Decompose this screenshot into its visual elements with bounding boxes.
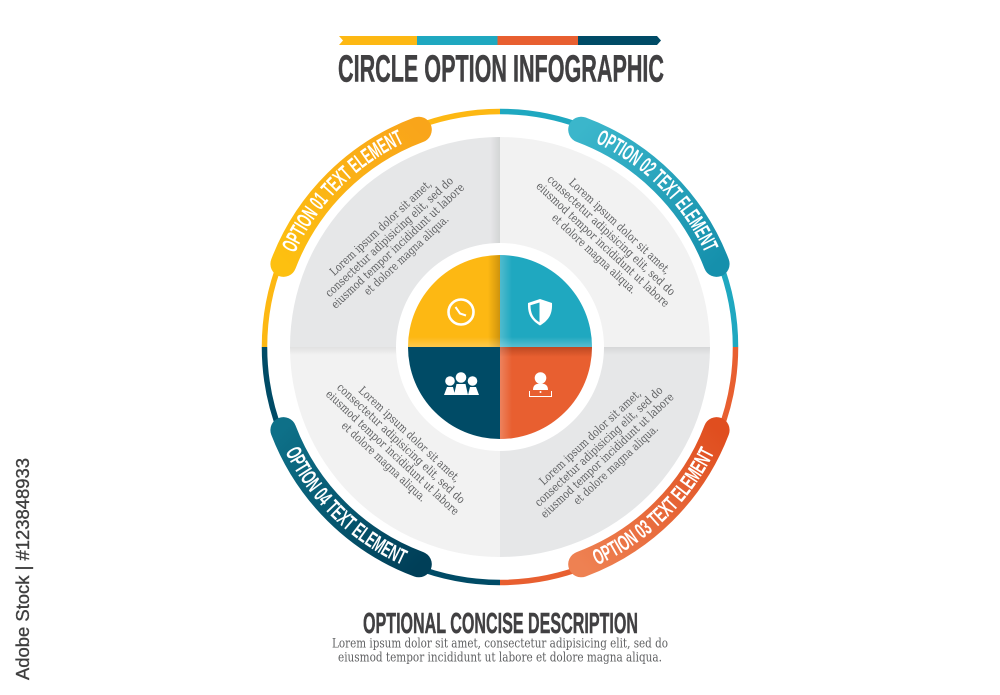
option 2 band xyxy=(568,116,730,277)
header colour bar xyxy=(339,36,661,45)
panel: quadrant disk xyxy=(290,137,710,557)
white inner ring xyxy=(396,243,604,451)
text block: option 1: consectetur adipisicing elit, sed do xyxy=(322,174,456,300)
description body xyxy=(332,636,668,666)
description body: eiusmod tempor incididunt ut labore et dolore magna aliqua. xyxy=(338,650,662,666)
option 4 band: OPTION 04 TEXT ELEMENT xyxy=(286,447,408,564)
option 1 band xyxy=(270,116,432,277)
icon: laptop user xyxy=(529,372,552,397)
text block: option 2: eiusmod tempor incididunt ut labore xyxy=(533,179,673,310)
text block: option 4: consectetur adipisicing elit, sed do xyxy=(334,380,468,506)
text block: option 4: et dolore magna aliqua. xyxy=(339,419,429,505)
text block: option 3: consectetur adipisicing elit, sed do xyxy=(532,383,666,509)
text block: option 4: Lorem ipsum dolor sit amet, xyxy=(356,383,463,485)
option 4 band xyxy=(270,417,432,578)
text block: option 2: consectetur adipisicing elit, sed do xyxy=(544,172,678,298)
option 2 band: OPTION 02 TEXT ELEMENT xyxy=(598,130,719,251)
option 3 band: OPTION 03 TEXT ELEMENT xyxy=(593,446,714,564)
text block: option 1: et dolore magna aliqua. xyxy=(361,212,451,298)
text block: option 2: Lorem ipsum dolor sit amet, xyxy=(566,175,674,277)
description heading: OPTIONAL CONCISE DESCRIPTION xyxy=(363,608,638,640)
text block: option 1: Lorem ipsum dolor sit amet, xyxy=(327,177,434,278)
infographic canvas xyxy=(15,36,738,680)
text block: option 1: eiusmod tempor incididunt ut labore xyxy=(328,180,467,311)
text block: option 2: et dolore magna aliqua. xyxy=(549,211,640,297)
icon: team xyxy=(444,372,479,395)
option 3 band xyxy=(568,417,730,578)
icon: shield xyxy=(528,299,552,326)
title: CIRCLE OPTION INFOGRAPHIC xyxy=(338,49,664,91)
icon: clock xyxy=(448,300,474,324)
text block: option 3: Lorem ipsum dolor sit amet, xyxy=(536,386,644,488)
centre circle quadrants xyxy=(408,255,592,439)
description body: Lorem ipsum dolor sit amet, consectetur adipisicing elit, sed do xyxy=(332,636,668,652)
text block: option 3: eiusmod tempor incididunt ut labore xyxy=(538,390,677,521)
outer ring xyxy=(264,112,736,582)
text block: option 4: eiusmod tempor incididunt ut labore xyxy=(323,387,462,518)
stock credit: Adobe Stock | #123848933 xyxy=(13,458,33,680)
option 1 band: OPTION 01 TEXT ELEMENT xyxy=(282,129,402,252)
text block: option 3: et dolore magna aliqua. xyxy=(570,422,661,508)
